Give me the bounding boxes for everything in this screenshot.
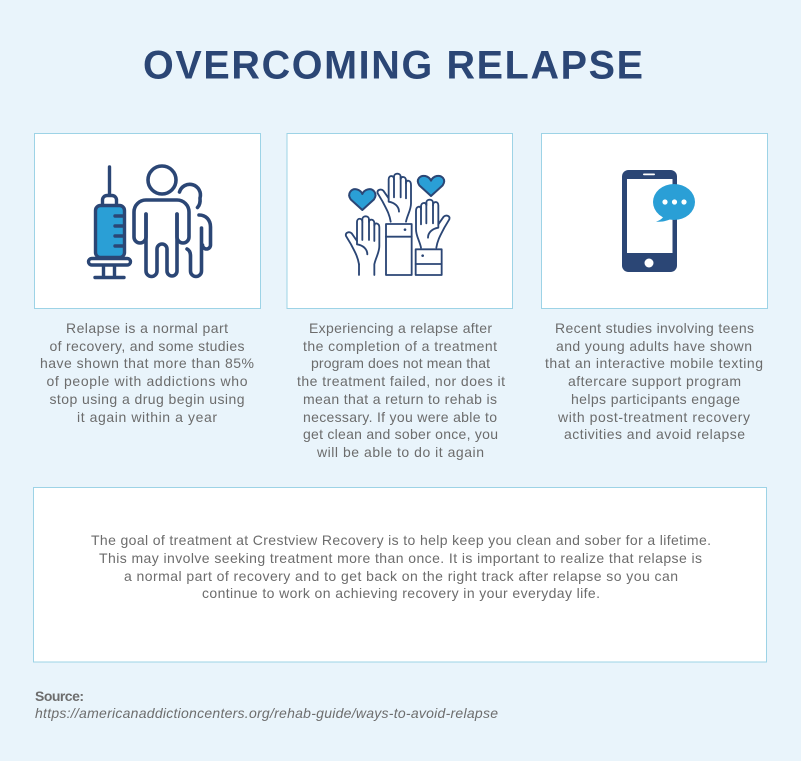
text: relapse is normal xyxy=(40,320,254,425)
icon: middle hand xyxy=(378,174,412,275)
text: relapse is normal: have shown that more than 85% xyxy=(40,355,254,371)
text: relapse is normal: of recovery, and some studies xyxy=(50,338,244,354)
text: a relapse is not failure xyxy=(297,320,505,460)
card: goal of treatment xyxy=(34,488,766,662)
icon: right hand xyxy=(416,200,449,275)
text: relapse is normal: it again within a year xyxy=(77,409,217,425)
text: a relapse is not failure: get clean and sober once, you xyxy=(303,426,498,442)
text: a relapse is not failure: will be able to do it again xyxy=(316,444,484,460)
text: mobile texting support: and young adults have shown xyxy=(556,338,752,354)
text: mobile texting support: helps participants engage xyxy=(571,391,740,407)
text: relapse is normal: of people with addictions who xyxy=(46,373,248,389)
icon: smartphone with chat bubble xyxy=(622,170,695,272)
text: a relapse is not failure: Experiencing a relapse after xyxy=(309,320,492,336)
icon: adult and child xyxy=(134,166,210,276)
icon: left heart xyxy=(349,189,375,210)
card: a relapse is not failure xyxy=(287,134,512,308)
icon: syringe xyxy=(88,167,130,278)
text: a relapse is not failure: necessary. If you were able to xyxy=(303,409,497,425)
text: a relapse is not failure: program does not mean that xyxy=(311,355,490,371)
text: mobile texting support: aftercare support program xyxy=(568,373,741,389)
text: relapse is normal: stop using a drug begin using xyxy=(50,391,244,407)
text: goal of treatment: This may involve seeking treatment more than once. It is important to realize that relapse is xyxy=(99,550,702,566)
panel: relapse is normal xyxy=(34,134,260,425)
card: mobile texting support xyxy=(542,134,768,308)
text: relapse is normal: Relapse is a normal part xyxy=(66,320,228,336)
text: mobile texting support: that an interactive mobile texting xyxy=(545,355,763,371)
panel: mobile texting support xyxy=(542,134,768,442)
text: mobile texting support xyxy=(545,320,763,442)
text: mobile texting support: with post-treatment recovery xyxy=(557,409,750,425)
text: mobile texting support: Recent studies involving teens xyxy=(555,320,754,336)
title: OVERCOMING RELAPSE xyxy=(143,44,643,88)
text: goal of treatment xyxy=(91,532,711,601)
source citation xyxy=(35,688,498,721)
text: goal of treatment: continue to work on achieving recovery in your everyday life. xyxy=(202,585,600,601)
source citation: Source: xyxy=(35,688,84,704)
text: a relapse is not failure: the completion of a treatment xyxy=(303,338,497,354)
source citation: https://americanaddictioncenters.org/rehab-guide/ways-to-avoid-relapse xyxy=(35,705,498,721)
icon: right heart xyxy=(418,176,444,196)
card: relapse is normal xyxy=(34,134,260,308)
text: mobile texting support: activities and avoid relapse xyxy=(564,426,745,442)
text: goal of treatment: The goal of treatment at Crestview Recovery is to help keep you clean and sober for a lifetime. xyxy=(91,532,711,548)
text: a relapse is not failure: the treatment failed, nor does it xyxy=(297,373,505,389)
icon: left hand xyxy=(346,216,379,275)
icon: raised hands and hearts xyxy=(346,174,449,275)
text: goal of treatment: a normal part of recovery and to get back on the right track after relapse so you can xyxy=(124,568,678,584)
panel: a relapse is not failure xyxy=(287,134,512,460)
text: a relapse is not failure: mean that a return to rehab is xyxy=(303,391,497,407)
panel: goal of treatment xyxy=(34,488,766,662)
